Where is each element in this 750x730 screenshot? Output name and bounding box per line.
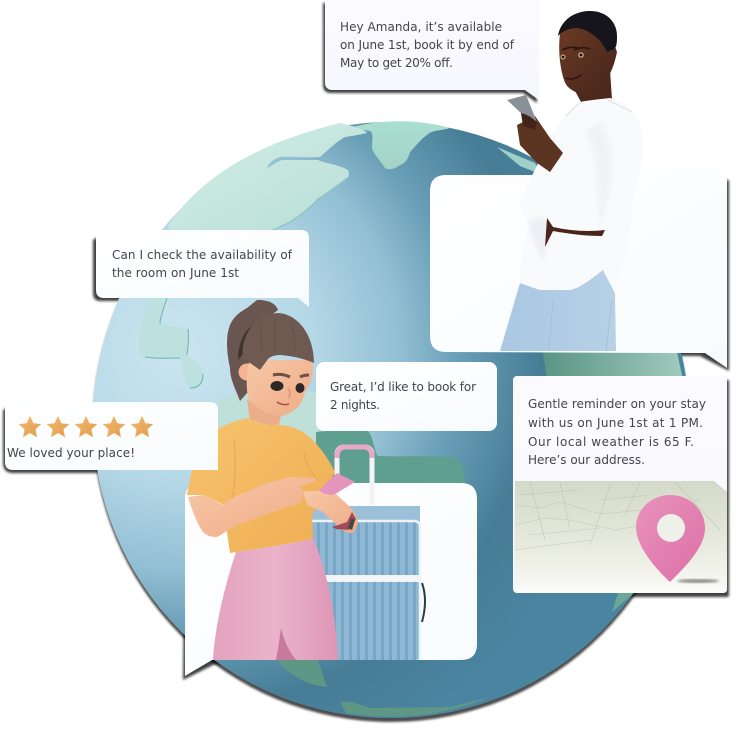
- woman's face: [247, 360, 313, 416]
- text: booking request: [330, 380, 476, 412]
- woman's neck: [247, 400, 282, 428]
- text: booking request: 2 nights.: [330, 398, 380, 412]
- woman's arm: [188, 477, 316, 537]
- continent: west island coast shadow: [145, 298, 203, 388]
- text: reminder: Gentle reminder on your stay: [528, 397, 706, 411]
- man's face: [559, 25, 617, 94]
- icon: map pin: [636, 495, 719, 583]
- woman's phone: [317, 473, 355, 497]
- bubble shadows behind globe: [3, 180, 729, 680]
- continent: west island: [139, 298, 203, 389]
- continent: south west: [277, 660, 327, 687]
- suitcase body: [312, 506, 420, 660]
- panel: booking reply bubble: [325, 0, 539, 100]
- text: availability question: [112, 248, 293, 280]
- panel: man's message bubble: [430, 168, 727, 368]
- panel: woman's message bubble: [185, 483, 477, 676]
- text: reminder: Here’s our address.: [528, 453, 645, 467]
- woman's face details: [270, 374, 309, 405]
- man's shirt: [520, 98, 643, 293]
- continent: south east: [612, 593, 634, 612]
- text: review: We loved your place!: [7, 446, 135, 460]
- figure: woman with phone: [187, 300, 358, 660]
- woman's watch: [332, 512, 356, 530]
- woman's other hand: [303, 490, 358, 533]
- continent: centre pale: [218, 391, 320, 470]
- continent: east: [543, 352, 683, 380]
- continent: south: [340, 697, 490, 717]
- continent: north cap: [350, 121, 450, 169]
- woman's hair: [243, 313, 314, 370]
- continent: north west coast shadow: [267, 178, 347, 232]
- panel: check availability bubble: [96, 230, 309, 307]
- continent: centre green: [316, 430, 465, 490]
- woman's ear: [238, 364, 256, 380]
- panel: book two nights bubble: [316, 362, 497, 431]
- text: booking offer: [340, 20, 515, 70]
- woman's trousers: [213, 538, 338, 660]
- man's crossed hand: [545, 218, 605, 247]
- globe: [93, 121, 689, 718]
- text: reminder: Our local weather is 65 F.: [528, 435, 694, 449]
- man's hair: [558, 11, 617, 52]
- man's phone: [507, 95, 537, 122]
- text: booking offer: May to get 20% off.: [340, 56, 453, 70]
- suitcase: [312, 447, 425, 660]
- text: booking offer: on June 1st, book it by end of: [340, 38, 515, 52]
- map: [514, 481, 727, 593]
- continent: north east sliver: [497, 147, 540, 174]
- icon: five star rating: [19, 416, 153, 437]
- text: availability question: the room on June 1st: [112, 266, 239, 280]
- woman's ponytail: [227, 300, 278, 401]
- panel: reminder bubble: [513, 376, 727, 593]
- figure: man with phone: [500, 11, 643, 351]
- text: reminder: with us on June 1st at 1 PM.: [528, 416, 703, 430]
- panel: review bubble: [5, 402, 218, 470]
- man's forearm and hand: [517, 116, 563, 172]
- text: booking request: Great, I’d like to book for: [330, 380, 476, 394]
- man's neck: [572, 70, 612, 104]
- continent: north west: [168, 123, 367, 232]
- text: booking offer: Hey Amanda, it’s available: [340, 20, 502, 34]
- suitcase handle: [337, 447, 372, 505]
- man's jeans: [500, 270, 616, 351]
- woman's T-shirt: [187, 418, 335, 553]
- text: reminder: [528, 397, 706, 467]
- man's eyes: [560, 52, 584, 60]
- text: availability question: Can I check the availability of: [112, 248, 293, 262]
